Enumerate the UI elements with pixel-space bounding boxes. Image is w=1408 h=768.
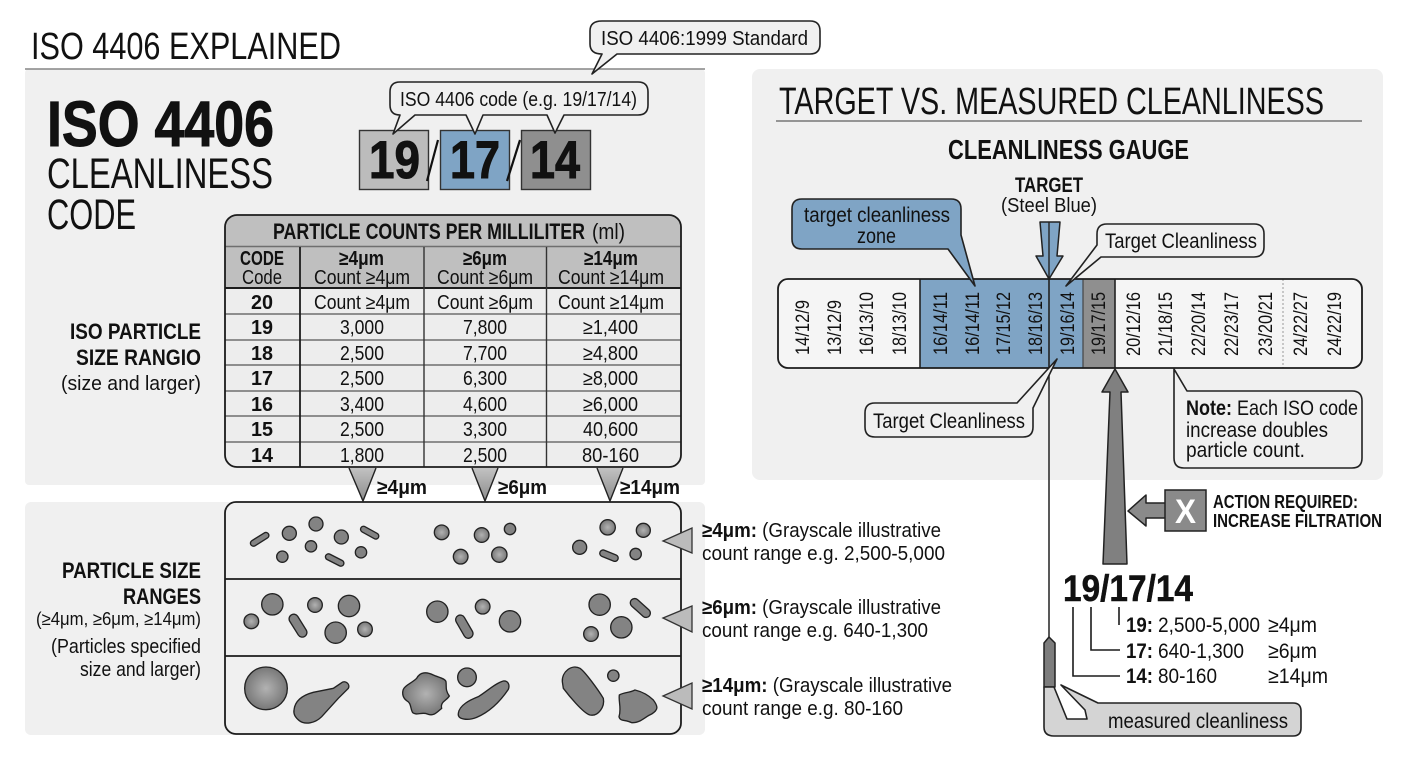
heading: ISO 4406 cleanliness code bbox=[47, 88, 274, 239]
gauge code labels: 19/17/15 bbox=[1088, 292, 1110, 355]
panel: particle size ranges bbox=[25, 502, 705, 735]
table body rows: 2,500 bbox=[463, 445, 507, 467]
gauge code labels: 18/13/10 bbox=[889, 292, 911, 355]
gauge code labels: 17/15/12 bbox=[993, 292, 1015, 355]
label: particle size ranges: (Particles specified bbox=[51, 636, 201, 658]
callout: ISO 4406 code example bbox=[390, 82, 648, 134]
table column headers: Count ≥6μm bbox=[437, 267, 533, 289]
label: particle size ranges: PARTICLE SIZE bbox=[62, 558, 201, 583]
label: ISO particle size: ISO PARTICLE bbox=[70, 319, 201, 344]
measured code breakdown: 19: bbox=[1126, 614, 1153, 637]
table header: PARTICLE COUNTS PER MILLILITER bbox=[273, 219, 585, 244]
callout: note on doubling: increase doubles bbox=[1186, 419, 1328, 442]
label: ISO particle size bbox=[61, 319, 201, 395]
heading: ISO 4406 cleanliness code: ISO 4406 bbox=[47, 88, 274, 160]
cleanliness gauge bbox=[778, 279, 1362, 368]
gauge code labels: 19/16/14 bbox=[1057, 292, 1079, 355]
table body rows: 20 bbox=[251, 292, 273, 314]
table column headers: Code bbox=[242, 267, 282, 289]
table body rows: 6,300 bbox=[463, 368, 507, 390]
gauge code labels: 23/20/21 bbox=[1255, 292, 1277, 356]
label: particle size ranges: (≥4μm, ≥6μm, ≥14μm) bbox=[36, 609, 201, 629]
label: target steel blue bbox=[1001, 174, 1097, 217]
measured code breakdown bbox=[1063, 568, 1328, 688]
size range note: 6 micron bbox=[663, 597, 941, 642]
heading: ISO 4406 cleanliness code: CODE bbox=[47, 191, 136, 239]
size range note: 4 micron: ≥4μm: (Grayscale illustrative bbox=[702, 520, 941, 542]
pointers: table to particle columns bbox=[349, 468, 680, 501]
code digits 19/17/14 bbox=[360, 130, 590, 190]
gauge code labels: 22/23/17 bbox=[1221, 292, 1243, 356]
callout: note on doubling: particle count. bbox=[1186, 439, 1305, 462]
callout: note on doubling: Note: Each ISO code bbox=[1186, 397, 1358, 420]
table column headers: CODE bbox=[240, 248, 284, 270]
gauge code labels: 18/16/13 bbox=[1025, 292, 1047, 355]
callout: target cleanliness zone: zone bbox=[857, 225, 896, 248]
table body rows: 3,400 bbox=[340, 394, 384, 416]
label: ISO particle size: (size and larger) bbox=[61, 373, 201, 395]
callout: target cleanliness upper bbox=[1066, 224, 1264, 286]
label: target steel blue: TARGET bbox=[1015, 174, 1083, 197]
table body rows: 7,800 bbox=[463, 317, 507, 339]
callout: ISO 4406 code example: ISO 4406 code (e.g. 19/17/14) bbox=[400, 89, 637, 111]
gauge code labels: 24/22/19 bbox=[1324, 292, 1346, 356]
table body rows: 17 bbox=[251, 368, 273, 390]
gauge code labels: 16/14/11 bbox=[962, 292, 984, 355]
table body rows: 40,600 bbox=[583, 419, 638, 441]
label: particle size ranges: size and larger) bbox=[80, 659, 201, 681]
callout: target cleanliness lower bbox=[865, 359, 1057, 437]
gauge code labels: 21/18/15 bbox=[1155, 292, 1177, 356]
label: target steel blue: (Steel Blue) bbox=[1001, 195, 1097, 217]
heading: ISO 4406 cleanliness code: CLEANLINESS bbox=[47, 150, 273, 198]
table body rows: 1,800 bbox=[340, 445, 384, 467]
gauge code labels: 20/12/16 bbox=[1123, 292, 1145, 356]
action required: ACTION REQUIRED: bbox=[1213, 492, 1358, 512]
measured code breakdown: 80-160 bbox=[1158, 665, 1217, 688]
table body rows bbox=[251, 292, 664, 467]
table body rows: ≥4,800 bbox=[583, 343, 638, 365]
table column headers: ≥4μm bbox=[339, 248, 384, 270]
callout: target cleanliness upper: Target Cleanliness bbox=[1105, 230, 1257, 253]
pointers: table to particle columns: ≥4μm bbox=[377, 477, 427, 499]
measured code breakdown: 14: bbox=[1126, 665, 1153, 688]
gauge code labels: 13/12/9 bbox=[824, 300, 846, 355]
table column headers: Count ≥14μm bbox=[558, 267, 664, 289]
table body rows: 2,500 bbox=[340, 368, 384, 390]
heading: cleanliness gauge: CLEANLINESS GAUGE bbox=[948, 134, 1189, 165]
pointers: table to particle columns: ≥6μm bbox=[498, 477, 547, 499]
particle size box bbox=[225, 502, 681, 734]
table body rows: 19 bbox=[251, 317, 273, 339]
table column headers: ≥6μm bbox=[463, 248, 507, 270]
measured code breakdown: ≥4μm bbox=[1268, 614, 1317, 637]
panel: target vs measured cleanliness bbox=[752, 69, 1383, 480]
measured code breakdown: 2,500-5,000 bbox=[1158, 614, 1260, 637]
table body rows: ≥6,000 bbox=[583, 394, 638, 416]
measured code breakdown: 17: bbox=[1126, 640, 1153, 663]
callout: target cleanliness zone: target cleanliness bbox=[804, 204, 950, 227]
title: ISO 4406 EXPLAINED bbox=[31, 26, 341, 68]
table body rows: 3,300 bbox=[463, 419, 507, 441]
measured code breakdown: 640-1,300 bbox=[1158, 640, 1244, 663]
table column headers bbox=[240, 248, 664, 289]
table body rows: 18 bbox=[251, 343, 273, 365]
target line bbox=[1048, 368, 1050, 638]
arrow: target pointer bbox=[1036, 222, 1063, 279]
table column headers: Count ≥4μm bbox=[314, 267, 410, 289]
size range note: 14 micron bbox=[663, 675, 952, 720]
callout: note on doubling bbox=[1174, 369, 1362, 468]
table body rows: 16 bbox=[251, 394, 273, 416]
table: particle counts per milliliter bbox=[225, 215, 681, 467]
callout: ISO 4406:1999 Standard bbox=[590, 21, 820, 74]
action required: X bbox=[1175, 493, 1196, 531]
table body rows: 80-160 bbox=[582, 445, 639, 467]
particles bbox=[244, 517, 657, 723]
size range note: 14 micron: ≥14μm: (Grayscale illustrative bbox=[702, 675, 952, 697]
gauge code labels: 16/13/10 bbox=[856, 292, 878, 355]
label: ISO particle size: SIZE RANGIO bbox=[76, 345, 201, 370]
gauge code labels: 24/22/27 bbox=[1290, 292, 1312, 356]
table body rows: ≥8,000 bbox=[583, 368, 638, 390]
table body rows: Count ≥4μm bbox=[314, 292, 410, 314]
callout: target cleanliness lower: Target Cleanliness bbox=[873, 410, 1025, 433]
measured code breakdown: ≥14μm bbox=[1268, 665, 1328, 688]
table column headers: ≥14μm bbox=[584, 248, 638, 270]
size range note: 14 micron: count range e.g. 80-160 bbox=[702, 698, 903, 720]
label: particle size ranges: RANGES bbox=[123, 584, 201, 609]
size range note: 6 micron: ≥6μm: (Grayscale illustrative bbox=[702, 597, 941, 619]
measured code breakdown: 19/17/14 bbox=[1063, 568, 1193, 609]
label: particle size ranges bbox=[36, 558, 201, 681]
arrow: measured pointer bbox=[1102, 369, 1128, 564]
code digits 19/17/14: 14 bbox=[530, 131, 580, 190]
table body rows: 3,000 bbox=[340, 317, 384, 339]
size range note: 4 micron: count range e.g. 2,500-5,000 bbox=[702, 543, 945, 565]
panel: ISO 4406 code overview bbox=[25, 69, 705, 485]
table body rows: 7,700 bbox=[463, 343, 507, 365]
table body rows: Count ≥14μm bbox=[558, 292, 664, 314]
table header: (ml) bbox=[592, 219, 625, 244]
table body rows: 2,500 bbox=[340, 343, 384, 365]
gauge code labels bbox=[792, 292, 1346, 356]
code digits 19/17/14: 17 bbox=[450, 131, 500, 190]
measured code breakdown: ≥6μm bbox=[1268, 640, 1317, 663]
table body rows: 4,600 bbox=[463, 394, 507, 416]
gauge code labels: 16/14/11 bbox=[930, 292, 952, 355]
code digits 19/17/14: 19 bbox=[369, 131, 420, 190]
table body rows: 14 bbox=[251, 445, 274, 467]
table body rows: ≥1,400 bbox=[583, 317, 638, 339]
gauge code labels: 22/20/14 bbox=[1188, 292, 1210, 356]
callout: target cleanliness zone bbox=[792, 199, 975, 286]
table body rows: 2,500 bbox=[340, 419, 384, 441]
action required bbox=[1128, 490, 1382, 531]
callout: measured cleanliness bbox=[1044, 637, 1301, 736]
callout: ISO 4406:1999 Standard: ISO 4406:1999 Standard bbox=[601, 28, 808, 50]
gauge code labels: 14/12/9 bbox=[792, 300, 814, 355]
table body rows: 15 bbox=[251, 419, 273, 441]
size range note: 4 micron bbox=[663, 520, 945, 565]
callout: measured cleanliness: measured cleanliness bbox=[1108, 710, 1288, 733]
size range note: 6 micron: count range e.g. 640-1,300 bbox=[702, 620, 928, 642]
table body rows: Count ≥6μm bbox=[437, 292, 533, 314]
pointers: table to particle columns: ≥14μm bbox=[620, 477, 680, 499]
